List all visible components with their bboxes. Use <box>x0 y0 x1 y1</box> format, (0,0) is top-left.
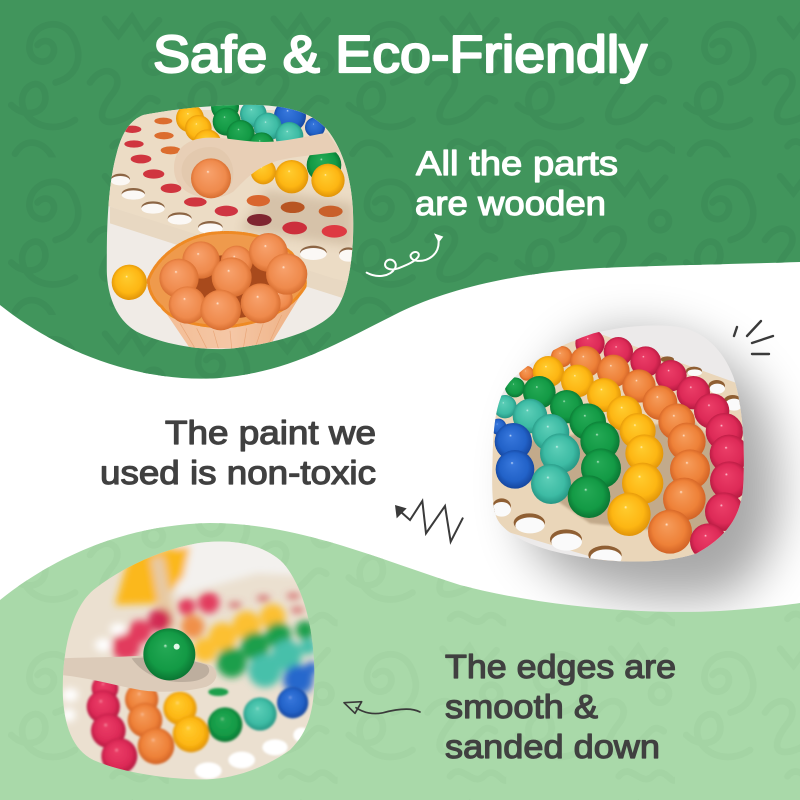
arrow: white squiggle <box>367 233 443 276</box>
caption: wooden parts <box>415 145 618 223</box>
caption: smooth edges: smooth & <box>445 688 598 725</box>
dark green top wave panel <box>0 0 800 379</box>
title: Safe & Eco-Friendly <box>153 26 647 84</box>
beads behind the spoon <box>176 104 345 197</box>
caption: non-toxic paint <box>100 414 376 491</box>
board holes <box>111 118 358 262</box>
photo: spoon and orange beads in cup <box>106 104 354 350</box>
photo: rainbow beads on board <box>492 326 744 562</box>
icon: burst lines <box>734 321 773 354</box>
caption: smooth edges <box>445 648 676 765</box>
green bead <box>143 628 195 680</box>
caption: smooth edges: The edges are <box>445 648 676 685</box>
blurred background <box>62 542 314 724</box>
wooden board <box>108 110 354 282</box>
caption: wooden parts: are wooden <box>415 185 606 223</box>
rainbow beads <box>490 329 749 560</box>
caption: wooden parts: All the parts <box>416 145 618 183</box>
wooden spoon <box>62 656 217 692</box>
arrow: zigzag <box>395 501 463 542</box>
soft beads <box>87 675 310 779</box>
silicone cup <box>148 232 305 348</box>
arrow: curved pointer <box>344 702 420 714</box>
caption: non-toxic paint: The paint we <box>165 414 376 451</box>
caption: smooth edges: sanded down <box>445 728 660 765</box>
light green bottom wave panel <box>0 523 800 800</box>
orange beads <box>159 158 307 330</box>
wooden spoon <box>174 133 341 198</box>
yellow bead <box>112 265 147 300</box>
caption: non-toxic paint: used is non-toxic <box>100 454 376 491</box>
photo drop shadow <box>522 332 778 600</box>
photo: green bead on spoon <box>62 542 314 780</box>
wooden board <box>490 335 747 563</box>
board holes <box>492 356 743 567</box>
